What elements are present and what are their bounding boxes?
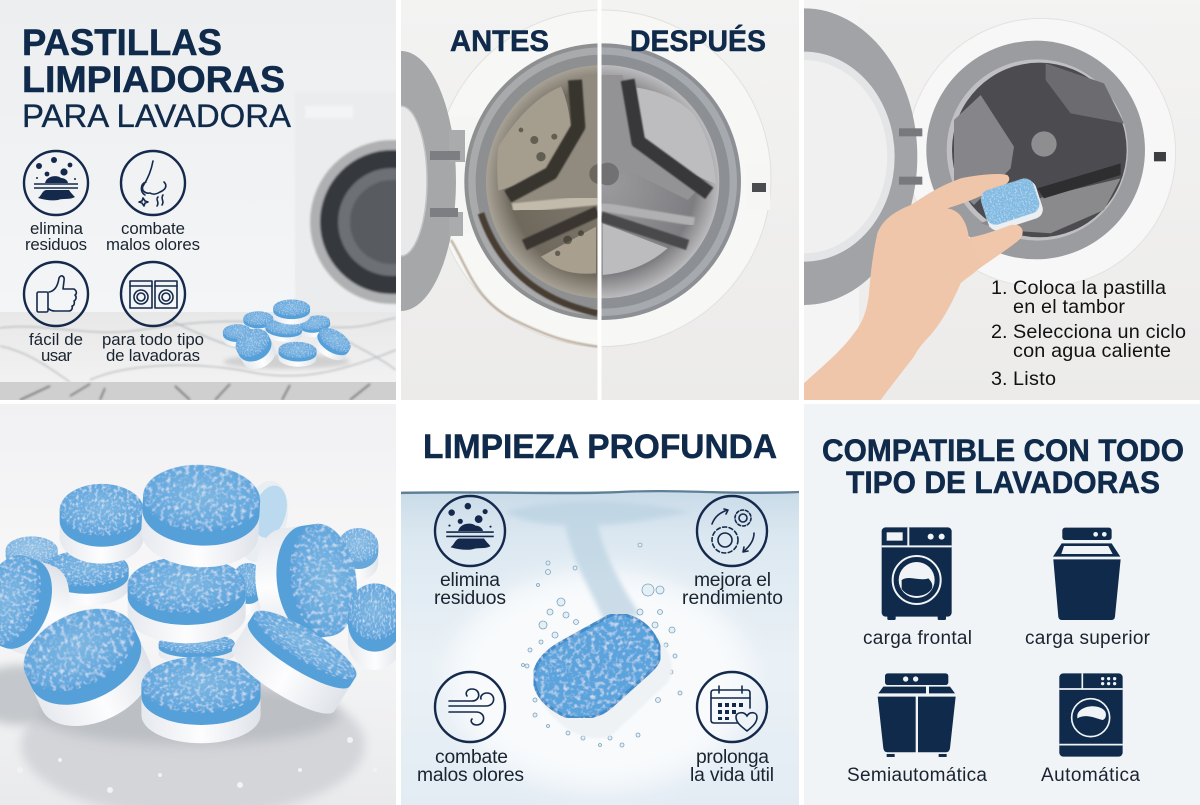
label: mejora el rendimiento: rendimiento	[682, 588, 783, 609]
splash	[505, 501, 690, 622]
fingertip	[970, 224, 1023, 248]
after half: clean drum	[602, 43, 741, 320]
icon: combate malos olores	[435, 672, 505, 742]
label: prolonga la vida util: la vida útil	[690, 765, 774, 786]
label: carga superior: carga superior	[1025, 628, 1151, 649]
open door	[401, 51, 465, 311]
washer body	[859, 302, 1200, 400]
before half: dirty drum	[450, 43, 598, 348]
label: facil de usar: fácil de	[29, 330, 83, 349]
icon: elimina residuos	[435, 496, 505, 566]
pile of small tablets	[223, 299, 355, 375]
panel: pastillas limpiadoras	[0, 0, 396, 400]
label: combate malos olores: malos olores	[106, 235, 200, 254]
steps list: Coloca la pastilla	[1013, 277, 1166, 299]
steps list: con agua caliente	[1013, 340, 1171, 362]
control latch	[752, 183, 770, 210]
hand	[804, 174, 1023, 400]
front ring	[907, 18, 1176, 287]
tablet	[980, 178, 1043, 230]
label: elimina residuos: elimina	[440, 570, 500, 591]
heading: despues: DESPUÉS	[630, 24, 766, 58]
lock	[1154, 152, 1166, 161]
icon: prolonga la vida util	[697, 672, 767, 742]
washer front panel	[401, 0, 799, 400]
label: elimina residuos: residuos	[434, 588, 506, 609]
icon: automatica	[1059, 673, 1123, 757]
label: prolonga la vida util: prolonga	[696, 747, 769, 768]
title	[24, 28, 292, 128]
icon: para todo tipo de lavadoras	[121, 262, 185, 326]
icon: carga superior	[1053, 528, 1121, 620]
icons group	[878, 527, 1123, 757]
steps list: 3.	[991, 368, 1008, 390]
water	[401, 491, 799, 805]
panel: compatible	[804, 404, 1200, 805]
label: combate malos olores: malos olores	[417, 765, 524, 786]
washer and hand illustration	[804, 8, 1200, 400]
panel background	[804, 0, 1200, 400]
steps list: Listo	[1013, 368, 1056, 390]
title: PASTILLAS	[22, 22, 222, 63]
label: para todo tipo de lavadoras: de lavadoras	[106, 346, 200, 365]
label: combate malos olores: combate	[435, 747, 508, 768]
title: LIMPIADORAS	[22, 59, 285, 100]
wet surface	[0, 665, 377, 805]
icon: combate malos olores	[121, 151, 185, 215]
icon: semiautomatica	[878, 673, 956, 757]
before and after washer illustration	[434, 10, 771, 347]
door gasket and drum	[926, 41, 1145, 259]
steps list: 1.	[991, 277, 1008, 299]
panel: limpieza profunda	[401, 404, 799, 805]
label: combate malos olores: combate	[121, 219, 185, 238]
label: elimina residuos: elimina	[30, 219, 84, 238]
title: TIPO DE LAVADORAS	[846, 464, 1160, 500]
steps list: Selecciona un ciclo	[1013, 321, 1186, 343]
blurred washing machine	[296, 138, 396, 312]
bubbles	[522, 543, 682, 747]
label: elimina residuos: residuos	[25, 235, 87, 254]
latch recess	[446, 117, 486, 233]
title: COMPATIBLE CON TODO	[822, 432, 1184, 468]
dissolving tablet	[534, 614, 672, 738]
marble countertop	[0, 312, 396, 400]
heading: antes: ANTES	[450, 25, 549, 58]
steps list: 2.	[991, 321, 1008, 343]
label: mejora el rendimiento: mejora el	[694, 570, 771, 591]
split line	[598, 0, 602, 400]
icon: facil de usar	[24, 262, 88, 326]
title: PARA LAVADORA	[22, 98, 292, 134]
steps list: en el tambor	[1013, 296, 1125, 318]
label: automatica: Automática	[1041, 765, 1140, 786]
icon: elimina residuos	[24, 151, 88, 215]
door with glass	[804, 8, 922, 305]
background	[0, 404, 396, 805]
panel: tablets close-up	[0, 404, 402, 805]
label: para todo tipo de lavadoras: para todo tipo	[102, 330, 204, 349]
label: carga frontal: carga frontal	[863, 628, 972, 649]
label: semiautomatica: Semiautomática	[847, 765, 987, 786]
icon: carga frontal	[882, 527, 952, 620]
panel: antes y despues	[401, 0, 799, 400]
panel: instrucciones	[804, 0, 1200, 400]
pile of large tablets	[0, 462, 402, 743]
label: facil de usar: usar	[41, 346, 72, 365]
title: LIMPIEZA PROFUNDA	[423, 428, 777, 466]
icon: mejora el rendimiento	[697, 496, 767, 566]
